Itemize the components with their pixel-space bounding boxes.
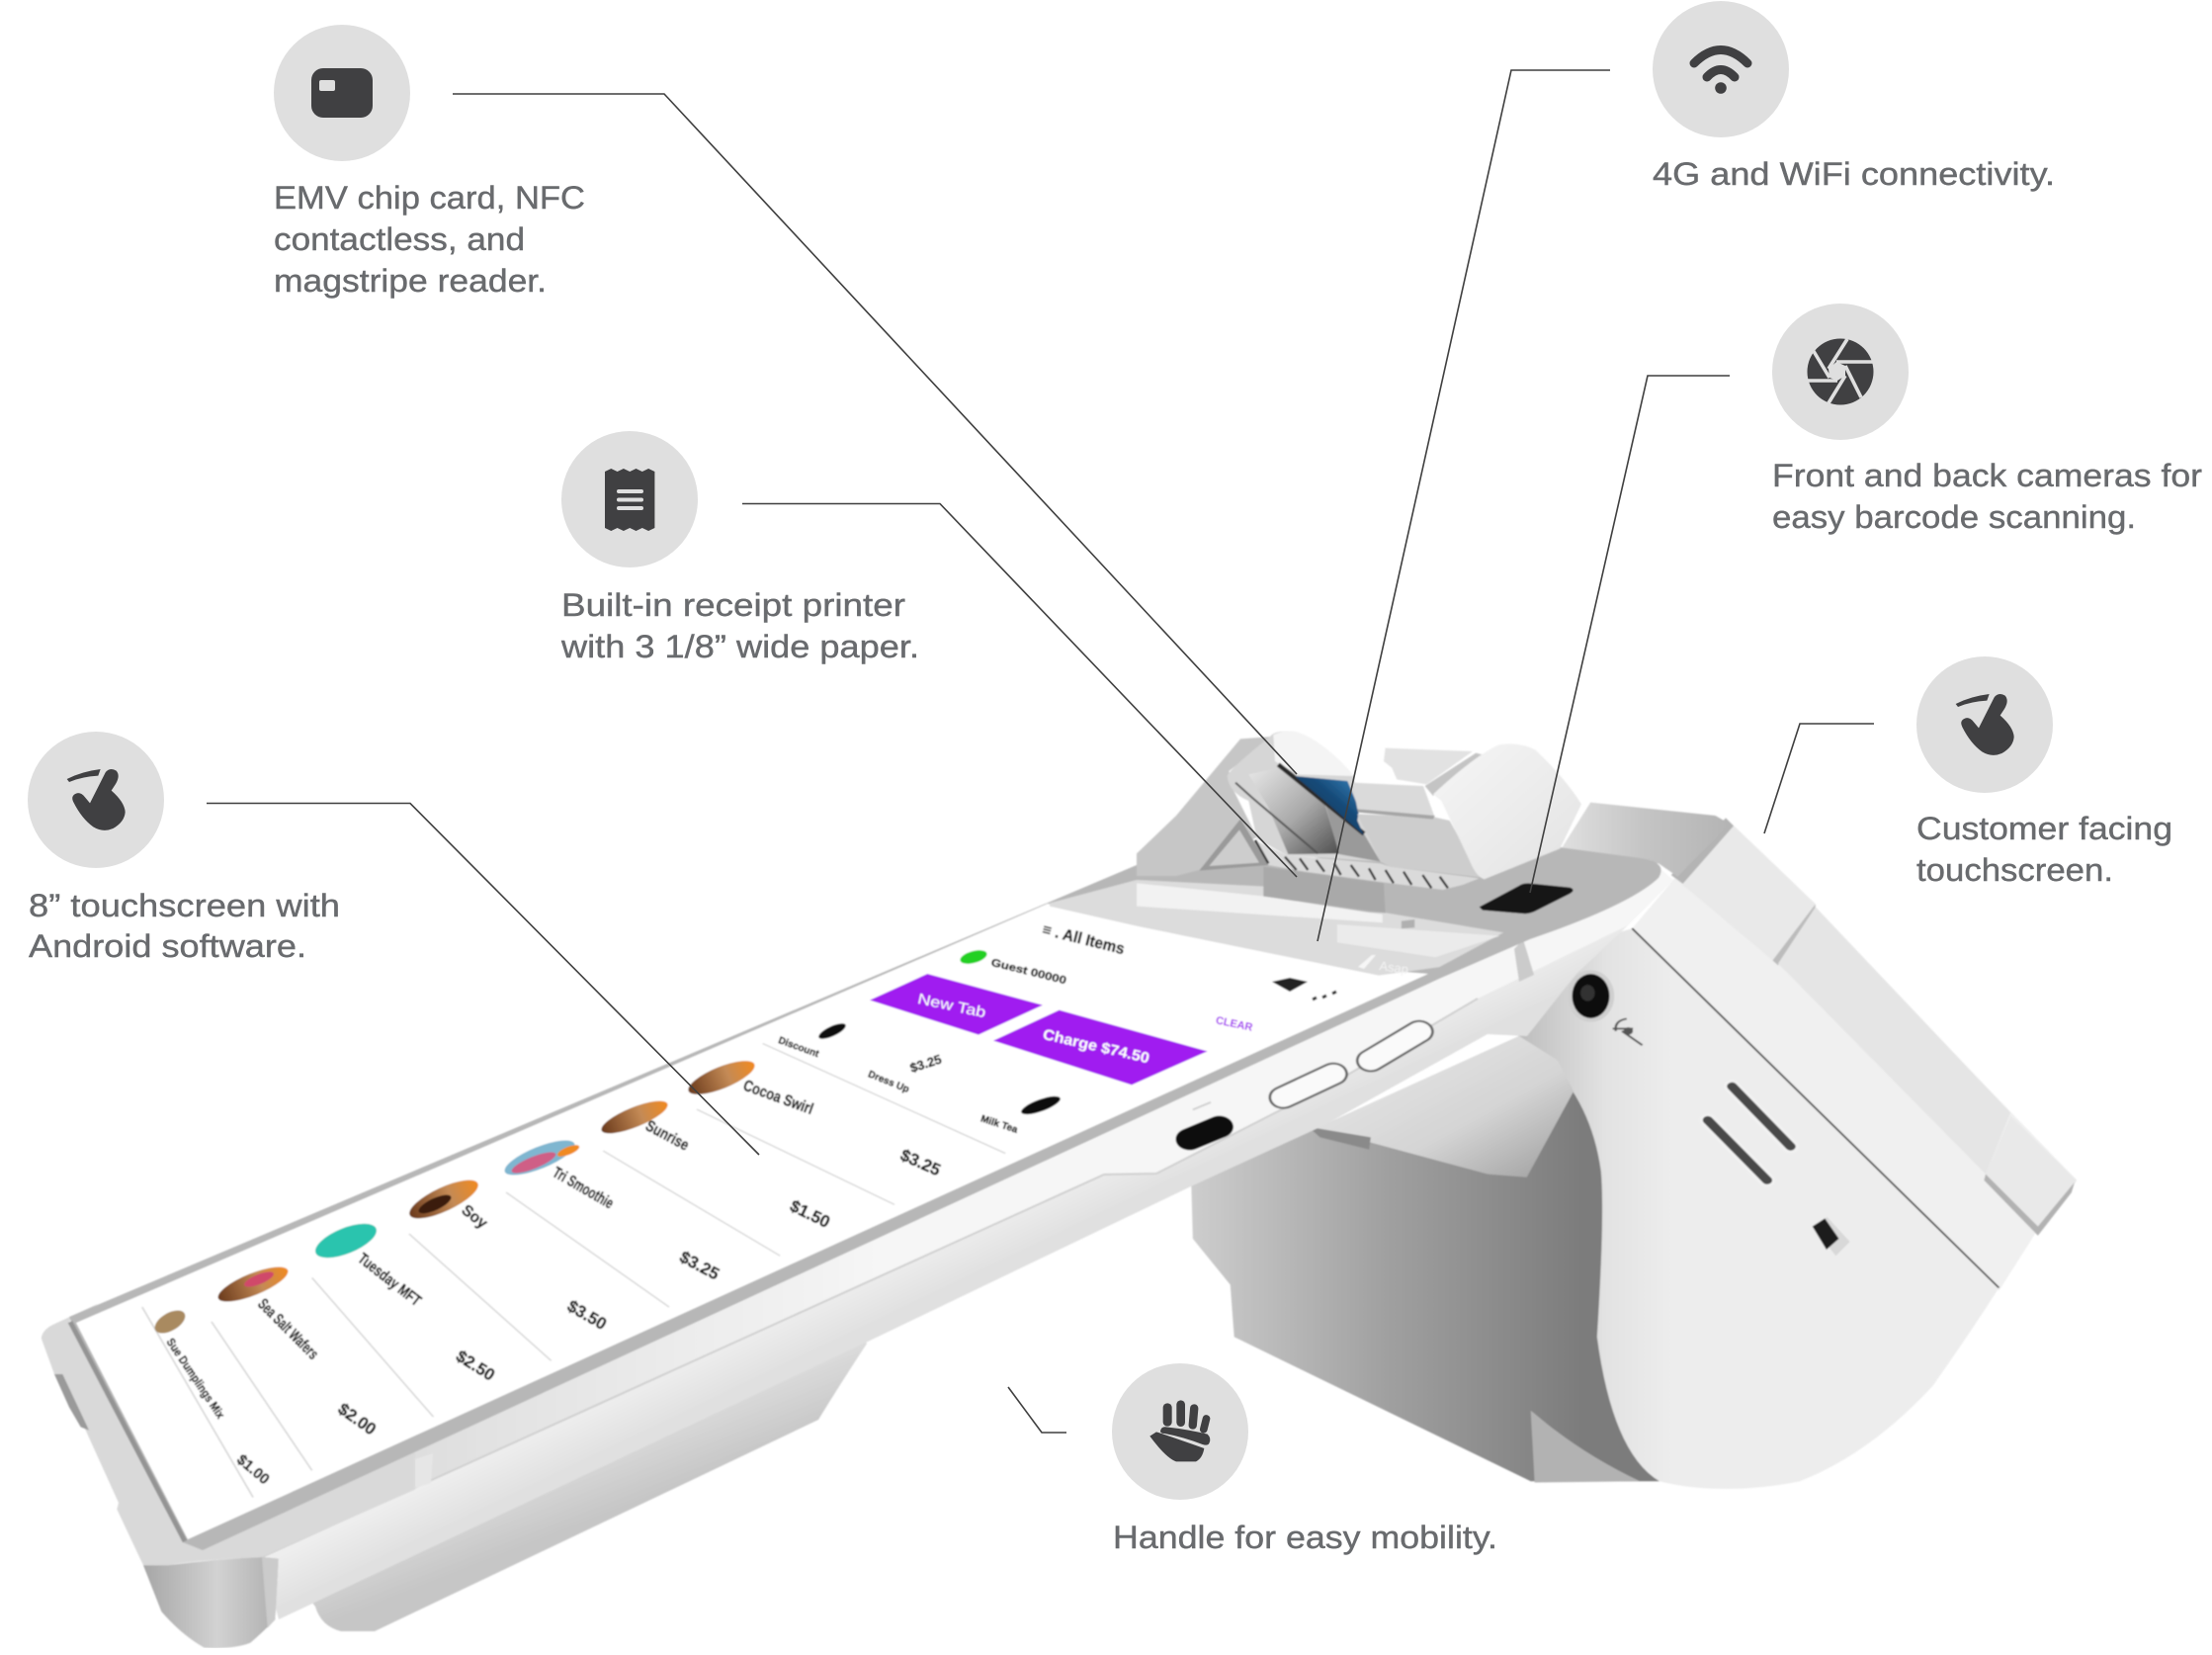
menu item prices: $2.50: [453, 1347, 498, 1385]
text: receipt printer: [560, 587, 919, 664]
side buttons and USB port: [1190, 1032, 1419, 1139]
text: handle: Handle for easy mobility.: [1113, 1520, 1497, 1555]
screen header: Guest 00000: [989, 957, 1067, 987]
sensor window: [1813, 1217, 1850, 1256]
icon: camera aperture: [1804, 338, 1874, 406]
button labels: Charge $74.50: [1042, 1026, 1151, 1067]
speaker slots: [1708, 1087, 1791, 1180]
callout: receipt printer: [560, 431, 919, 664]
callout: cameras: [1772, 304, 2202, 535]
card reader frame: [1228, 732, 1381, 862]
rear grey shoulder: [1561, 803, 1730, 877]
leader line: customer touchscreen: [1764, 724, 1874, 833]
front camera: [1480, 883, 1574, 914]
speckled handle underside: [1317, 1036, 1574, 1177]
callout: connectivity: [1653, 1, 2055, 192]
icon: wifi: [1694, 49, 1747, 94]
reader cover: [1273, 731, 1354, 776]
grey back wedge: [1137, 737, 1273, 876]
text: customer touchscreen: [1916, 811, 2172, 888]
menu item names: Cocoa Swirl: [741, 1078, 815, 1118]
leader line: card reader: [453, 94, 1297, 774]
icon: hand: [1149, 1400, 1211, 1461]
leader line: touchscreen: [207, 803, 759, 1155]
inner panel: [1248, 768, 1339, 854]
side port: [54, 1374, 89, 1431]
text: receipt printer: with 3 1/8” wide paper.: [560, 629, 919, 664]
dark card throat: [1278, 764, 1364, 833]
upper list items: Dress Up: [867, 1069, 910, 1095]
menu item prices: $1.50: [787, 1196, 833, 1232]
upper frame above crease: [198, 860, 1673, 1557]
grey stand block: [1191, 1036, 1659, 1481]
text: cameras: easy barcode scanning.: [1772, 499, 2136, 535]
callout: touchscreen: [28, 732, 340, 964]
text: cameras: [1772, 458, 2202, 535]
menu item prices: $1.00: [233, 1451, 273, 1488]
upper list items: Milk Tea: [979, 1113, 1019, 1136]
menu item names: Sunrise: [642, 1118, 692, 1155]
screen header: Asap: [1379, 958, 1409, 977]
leader line: cameras: [1530, 376, 1730, 893]
triangular support: [1199, 819, 1268, 871]
text: receipt printer: Built-in receipt printer: [561, 587, 905, 623]
text: card reader: [274, 180, 585, 299]
leader line: receipt printer: [742, 504, 1297, 877]
icon: payment card: [311, 68, 373, 118]
rear stand and housing: [1191, 818, 2077, 1489]
text: card reader: contactless, and: [274, 221, 525, 257]
serrated teeth: [1255, 840, 1448, 888]
plate shadow: [1263, 867, 1386, 913]
button labels: CLEAR: [1215, 1014, 1253, 1034]
upper list items: Discount: [777, 1035, 820, 1060]
menu item names: Tri Smoothie: [550, 1165, 616, 1212]
menu item names: Tuesday MFT: [355, 1251, 424, 1310]
upper list items: $3.25: [908, 1052, 943, 1076]
printer and card reader: [1137, 731, 1581, 914]
menu item names: [164, 1078, 815, 1422]
lower slot: [1324, 801, 1381, 862]
seam line: [1632, 928, 1999, 1288]
leader line: connectivity: [1318, 70, 1610, 941]
microphone symbol: [1613, 1018, 1643, 1045]
text: card reader: EMV chip card, NFC: [274, 180, 585, 216]
menu item names: Sue Dumplings Mix: [164, 1336, 227, 1422]
text: touchscreen: Android software.: [29, 928, 306, 964]
menu item names: Sea Salt Wafers: [254, 1296, 321, 1363]
text: touchscreen: [29, 888, 340, 964]
screen glass strip: [1050, 880, 1503, 976]
screen content: dividers: [142, 1043, 1005, 1498]
text: connectivity: 4G and WiFi connectivity.: [1653, 156, 2055, 192]
top plate and bezel: [69, 847, 1661, 1550]
crease line: [262, 999, 1478, 1557]
icon: touch gesture: [67, 769, 126, 830]
callout: customer touchscreen: [1916, 656, 2172, 888]
text: customer touchscreen: touchscreen.: [1916, 852, 2113, 888]
callout: handle: [1112, 1363, 1497, 1555]
tear bar: [1255, 840, 1480, 890]
menu item names: Soy: [459, 1202, 490, 1232]
text: customer touchscreen: Customer facing: [1916, 811, 2172, 846]
housing foot wedge: [1531, 1411, 1640, 1482]
customer facing screen panel: [1632, 818, 2077, 1291]
purple action buttons: [870, 974, 1208, 1085]
menu item prices: $3.25: [676, 1248, 723, 1284]
leader line: handle: [1008, 1387, 1066, 1433]
callout: card reader: [274, 25, 585, 299]
lower grip: [297, 1325, 867, 1631]
text: card reader: magstripe reader.: [274, 263, 547, 299]
screen display: [76, 904, 1428, 1539]
menu item prices: [233, 1146, 944, 1488]
text: cameras: Front and back cameras for: [1772, 458, 2202, 493]
text: touchscreen: 8” touchscreen with: [29, 888, 340, 923]
menu item thumbnails: [151, 1054, 758, 1338]
rear white housing: [1457, 928, 1999, 1489]
icon: touch gesture: [1956, 694, 2014, 755]
blue payment card: [1295, 776, 1364, 835]
screen header: ≡ . All Items: [1041, 921, 1126, 958]
metal foot: [143, 1557, 279, 1648]
upper list items: [777, 1020, 1063, 1136]
middle housing: [1384, 748, 1473, 784]
menu item prices: $2.00: [334, 1400, 380, 1438]
menu item prices: $3.25: [897, 1146, 944, 1179]
corner frame and foot: [42, 1303, 415, 1648]
screen header: [959, 921, 1409, 1000]
icon: receipt: [605, 469, 654, 531]
button labels: [916, 991, 1253, 1067]
tablet side strip: [262, 866, 1673, 1619]
menu item prices: $3.50: [564, 1296, 610, 1334]
inner left bezel line: [70, 1322, 185, 1541]
button labels: New Tab: [916, 991, 987, 1021]
rear camera: [1568, 970, 1614, 1022]
bezel frame: [42, 1303, 415, 1565]
device: POS terminal: [42, 731, 2077, 1648]
white roller cover: [1433, 743, 1581, 879]
